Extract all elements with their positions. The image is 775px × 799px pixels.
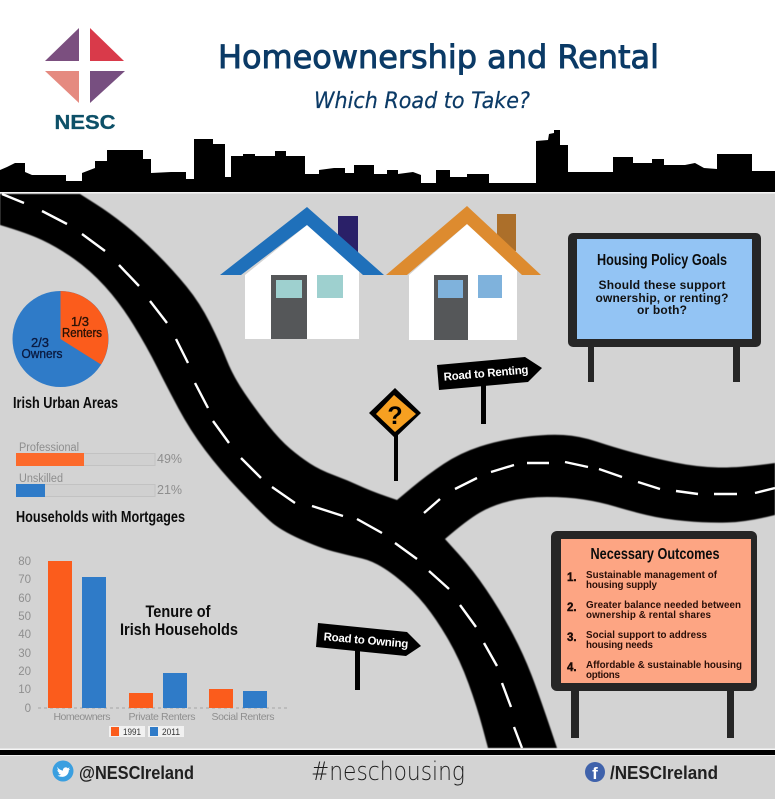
pie chart: irish urban areas: 1/3 bbox=[71, 314, 89, 329]
house: orange bbox=[386, 206, 541, 340]
billboard: necessary outcomes: Affordable & sustainable housing bbox=[586, 660, 742, 671]
billboard: necessary outcomes: 3. bbox=[567, 632, 577, 644]
progress bars: households with mortgages: Professional bbox=[19, 442, 79, 454]
signpost: road to renting bbox=[437, 357, 542, 424]
billboard: housing policy goals bbox=[568, 233, 761, 382]
bar chart: tenure of irish households: 50 bbox=[18, 611, 31, 623]
progress bars: households with mortgages bbox=[16, 442, 182, 497]
city skyline bbox=[0, 130, 775, 192]
billboard: necessary outcomes: housing needs bbox=[586, 640, 654, 651]
pie chart: irish urban areas: Owners bbox=[22, 346, 63, 361]
billboard: necessary outcomes bbox=[551, 531, 757, 738]
bar chart: tenure of irish households: 20 bbox=[18, 666, 31, 678]
facebook handle: /NESCIreland bbox=[610, 763, 718, 783]
signpost: road to owning bbox=[316, 623, 421, 690]
progress bars: households with mortgages: 21% bbox=[157, 483, 182, 497]
bar chart: tenure of irish households: 30 bbox=[18, 648, 31, 660]
bar chart: tenure of irish households: 70 bbox=[18, 574, 31, 586]
billboard: necessary outcomes: 2. bbox=[567, 602, 577, 614]
signpost: road to renting: Road to Renting bbox=[443, 364, 529, 384]
pie chart: irish urban areas: Renters bbox=[62, 325, 102, 340]
billboard: necessary outcomes: housing supply bbox=[586, 580, 658, 591]
bar chart: tenure of irish households: 0 bbox=[25, 703, 31, 715]
question mark road sign bbox=[369, 388, 421, 481]
billboard: housing policy goals: or both? bbox=[637, 303, 687, 317]
subtitle: Which Road to Take? bbox=[314, 89, 530, 114]
NESC logo bbox=[45, 28, 125, 134]
icon: facebook: f bbox=[592, 764, 598, 783]
bar chart: tenure of irish households bbox=[18, 556, 290, 737]
billboard: necessary outcomes: 1. bbox=[567, 572, 577, 584]
billboard: necessary outcomes: Sustainable management of bbox=[586, 570, 718, 581]
billboard: necessary outcomes: Necessary Outcomes bbox=[590, 546, 720, 563]
heading: households with mortgages: Households with Mortgages bbox=[16, 509, 185, 526]
pie chart: irish urban areas: 2/3 bbox=[31, 335, 49, 350]
icon: facebook bbox=[585, 762, 605, 783]
billboard: housing policy goals: Housing Policy Goals bbox=[597, 252, 727, 269]
bar chart: tenure of irish households: Social Renters bbox=[212, 711, 274, 723]
billboard: necessary outcomes: Social support to address bbox=[586, 630, 708, 641]
question mark road sign: ? bbox=[387, 402, 403, 430]
bar chart: tenure of irish households: 80 bbox=[18, 556, 31, 568]
heading: tenure of irish households bbox=[120, 602, 238, 639]
billboard: housing policy goals: ownership, or renting? bbox=[596, 291, 728, 305]
heading: tenure of irish households: Irish Households bbox=[120, 620, 238, 639]
billboard: necessary outcomes: Greater balance needed between bbox=[586, 600, 741, 611]
bar chart: tenure of irish households: 60 bbox=[18, 593, 31, 605]
bar chart: tenure of irish households: Private Renters bbox=[128, 711, 196, 723]
progress bars: households with mortgages: Unskilled bbox=[19, 473, 63, 485]
twitter handle: @NESCIreland bbox=[79, 763, 194, 783]
pie chart: irish urban areas bbox=[12, 291, 108, 387]
house: blue bbox=[220, 207, 384, 339]
NESC logo: NESC bbox=[54, 112, 116, 134]
billboard: necessary outcomes: 4. bbox=[567, 662, 577, 674]
bar chart: tenure of irish households: 2011 bbox=[162, 727, 180, 737]
bar chart: tenure of irish households: 40 bbox=[18, 629, 31, 641]
billboard: necessary outcomes: ownership & rental shares bbox=[586, 610, 712, 621]
billboard: housing policy goals: Should these support bbox=[598, 278, 726, 292]
title: Homeownership and Rental bbox=[218, 38, 659, 76]
bar chart: tenure of irish households: 10 bbox=[18, 684, 31, 696]
bar chart: tenure of irish households: 1991 bbox=[123, 727, 141, 737]
billboard: necessary outcomes: options bbox=[586, 670, 621, 681]
heading: irish urban areas: Irish Urban Areas bbox=[13, 395, 118, 412]
road network bbox=[0, 194, 775, 748]
hashtag: #neschousing bbox=[311, 757, 465, 787]
bar chart: tenure of irish households: Homeowners bbox=[54, 711, 110, 723]
heading: tenure of irish households: Tenure of bbox=[146, 602, 211, 621]
icon: twitter bbox=[52, 760, 74, 782]
progress bars: households with mortgages: 49% bbox=[157, 452, 182, 466]
signpost: road to owning: Road to Owning bbox=[323, 631, 409, 651]
